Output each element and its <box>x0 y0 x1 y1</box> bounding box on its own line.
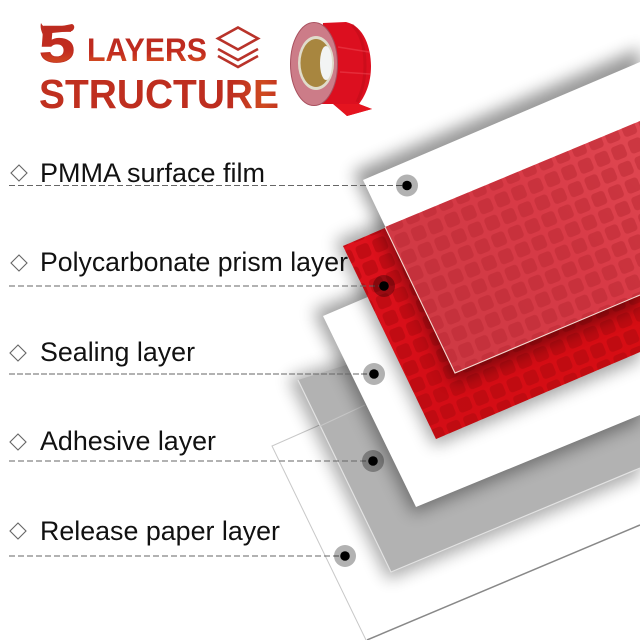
callout: Release paper layer <box>9 516 356 567</box>
layer 3: sealing white sheet <box>313 172 640 514</box>
title <box>39 16 279 117</box>
callout: PMMA surface film <box>9 158 418 196</box>
title word LAYERS: LAYERS <box>87 32 207 68</box>
layer 4: adhesive gray sheet <box>288 264 640 580</box>
callout: Polycarbonate prism layer: Polycarbonate prism layer <box>40 247 348 277</box>
callout: Adhesive layer <box>9 426 384 472</box>
callout: Release paper layer: Release paper layer <box>40 516 280 546</box>
layer 2: red polycarbonate prism sheet <box>335 110 640 446</box>
callout: Polycarbonate prism layer <box>9 247 395 297</box>
icon: stacked layers <box>218 28 258 67</box>
icon: red reflective tape roll <box>290 22 372 116</box>
callout: PMMA surface film: PMMA surface film <box>40 158 265 188</box>
layer 5: release paper sheet <box>272 290 640 640</box>
callout: Adhesive layer: Adhesive layer <box>40 426 216 456</box>
callout: Sealing layer <box>9 337 385 385</box>
title numeral 5: 5 <box>39 16 75 74</box>
layer 1: transparent PMMA film <box>353 48 640 383</box>
callout: Sealing layer: Sealing layer <box>40 337 195 367</box>
title word STRUCTURE: STRUCTURE <box>39 71 279 117</box>
